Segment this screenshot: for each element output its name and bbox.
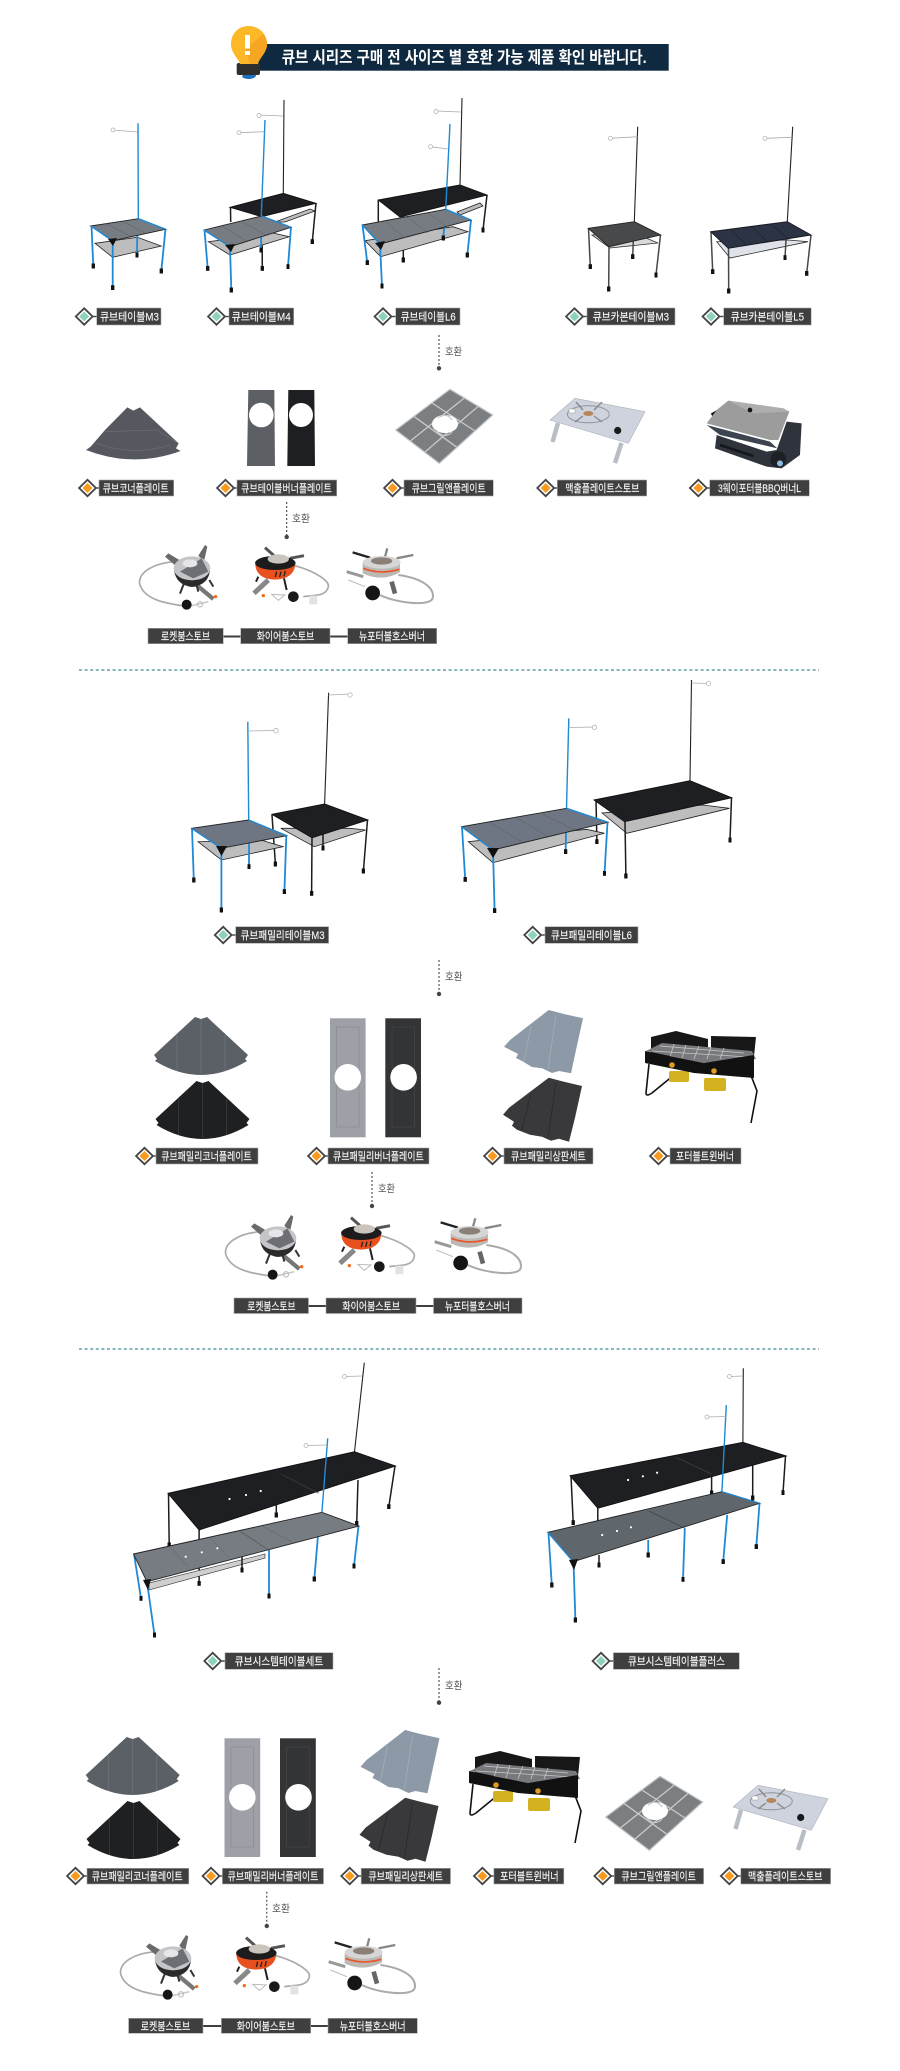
label: 3-way portable BBQ burner: 3웨이포터블BBQ버너L [718,482,801,495]
label: max plate stove: 맥출플레이트스토브 [565,482,639,495]
label: cube grill and plate: 큐브그릴앤플레이트 [412,482,486,495]
panel: section 3 system tables [134,1363,786,1669]
label: cube corner plate: 큐브코너플레이트 [103,482,169,495]
label: cube table burner plate [217,480,337,496]
label: cube corner plate [79,480,174,496]
icon: new portable hose burner [435,1218,521,1273]
connector: compatible 5 [437,1668,463,1705]
label: family corner plate [67,1868,189,1884]
connector: compatible 6: 호환 [272,1903,290,1915]
product: max plate stove [733,1785,828,1850]
product: family corner plate [154,1017,250,1139]
label: cube family table L6 [524,927,638,943]
product: max plate stove [550,398,645,463]
labels: stove names: 로켓붐스토브 [247,1300,296,1313]
label: cube system table plus [593,1653,739,1669]
connector: compatible 1 [437,335,462,370]
label: max plate stove [721,1868,831,1884]
label: family burner plate: 큐브패밀리버너플레이트 [333,1150,424,1163]
label: cube family table M3: 큐브패밀리테이블M3 [241,929,325,942]
label: cube grill and plate: 큐브그릴앤플레이트 [621,1870,696,1883]
connector: compatible 4: 호환 [378,1183,395,1195]
label: cube table M3 [76,308,161,325]
connector: compatible 3 [437,960,463,996]
label: cube system table set: 큐브시스템테이블세트 [235,1655,323,1668]
panel: section 2 stoves [225,1215,522,1314]
label: family corner plate [136,1148,258,1164]
label: cube table L6 [375,308,460,325]
label: max plate stove [537,480,647,496]
banner bar [258,44,669,71]
labels: stove names: 로켓붐스토브 [161,630,210,643]
labels: stove names [129,2018,417,2033]
product: cube carbon table M3 [588,127,661,289]
product: family top plate set [503,1010,583,1142]
label: portable twin burner [474,1868,564,1884]
product: family burner plate [224,1738,316,1857]
icon: rocket boom stove [120,1935,198,2000]
label: cube table burner plate: 큐브테이블버너플레이트 [241,482,332,495]
connector: compatible 4 [370,1172,395,1208]
label: cube carbon table L5 [703,308,811,325]
labels: stove names: 화이어붐스토브 [257,630,314,643]
label: cube table M3: 큐브테이블M3 [100,310,159,324]
panel: section 3 stoves [120,1935,417,2033]
label: family top plate set [484,1148,593,1164]
product: family top plate set [360,1730,440,1862]
panel: section 2 family tables [192,680,732,943]
label: cube carbon table L5: 큐브카본테이블L5 [731,310,804,324]
label: cube system table plus: 큐브시스템테이블플러스 [628,1655,725,1668]
product: portable twin burner [469,1751,581,1843]
product: cube family table L6 [462,680,732,911]
product: portable twin burner [645,1031,757,1123]
label: cube grill and plate [384,480,493,496]
icon: new portable hose burner [329,1938,415,1993]
panel: section 1 accessories [79,389,809,496]
product: cube carbon table L5 [711,127,811,291]
label: 3-way portable BBQ burner [690,480,809,496]
product: cube table L6 [362,98,487,286]
label: cube carbon table M3 [566,308,675,325]
panel: section 1 stoves [139,545,437,644]
product: cube system table set [134,1363,396,1635]
label: family burner plate [308,1148,429,1164]
connector: compatible 5: 호환 [445,1680,463,1692]
product: cube table M4 [204,100,316,290]
label: family burner plate: 큐브패밀리버너플레이트 [228,1870,318,1883]
label: cube family table L6: 큐브패밀리테이블L6 [551,929,632,942]
product: family burner plate [330,1018,421,1137]
icon: rocket boom stove [139,545,217,610]
product: cube grill and plate [606,1776,703,1850]
icon: fire boom stove [340,1218,414,1274]
label: portable twin burner: 포터블트윈버너 [676,1149,734,1163]
labels: stove names: 화이어붐스토브 [342,1300,400,1313]
label: portable twin burner: 포터블트윈버너 [500,1869,559,1883]
label: portable twin burner [650,1148,741,1164]
product: cube table M3 [91,123,166,288]
banner text: 큐브 시리즈 구매 전 사이즈 별 호환 가능 제품 확인 바랍니다. [282,48,647,67]
label: family corner plate: 큐브패밀리코너플레이트 [92,1870,183,1883]
label: cube grill and plate [594,1868,704,1884]
icon: rocket boom stove [225,1215,303,1280]
connector: compatible 1: 호환 [445,346,462,358]
connector: compatible 2: 호환 [292,513,310,525]
connector: compatible 6 [265,1892,290,1928]
labels: stove names [234,1298,522,1314]
label: family burner plate [203,1868,324,1884]
labels: stove names: 뉴포터블호스버너 [340,2020,406,2033]
product: cube corner plate [86,407,181,459]
panel: section 2 accessories [136,1010,757,1164]
label: cube family table M3 [215,927,329,943]
panel: section 1 tables [76,98,811,325]
product: 3-way portable BBQ burner [707,401,802,468]
product: cube system table plus [548,1368,786,1620]
labels: stove names: 뉴포터블호스버너 [445,1300,510,1313]
connector: compatible 2 [284,502,310,539]
product: family corner plate [86,1737,180,1859]
product: cube grill and plate [396,389,493,463]
labels: stove names: 로켓붐스토브 [141,2020,190,2033]
icon: fire boom stove [235,1938,309,1994]
labels: stove names [148,628,437,644]
product: cube family table M3 [192,693,368,910]
icon: fire boom stove [254,548,328,604]
label: cube carbon table M3: 큐브카본테이블M3 [593,310,669,324]
label: cube system table set [204,1653,333,1669]
labels: stove names: 화이어붐스토브 [237,2020,295,2033]
panel: section 3 accessories [67,1730,831,1884]
label: cube table M4: 큐브테이블M4 [232,310,291,324]
product: cube table burner plate [247,390,315,466]
icon: warning lightbulb [231,26,267,79]
label: max plate stove: 맥출플레이트스토브 [748,1870,822,1883]
connector: compatible 3: 호환 [445,971,463,983]
label: family top plate set: 큐브패밀리상판세트 [511,1150,586,1163]
label: cube table L6: 큐브테이블L6 [401,310,456,324]
label: cube table M4 [208,308,294,325]
icon: new portable hose burner [347,548,433,603]
notice banner with lightbulb icon [231,26,669,79]
label: family top plate set: 큐브패밀리상판세트 [368,1870,443,1883]
labels: stove names: 뉴포터블호스버너 [359,630,425,643]
label: family corner plate: 큐브패밀리코너플레이트 [161,1150,252,1163]
label: family top plate set [341,1868,450,1884]
